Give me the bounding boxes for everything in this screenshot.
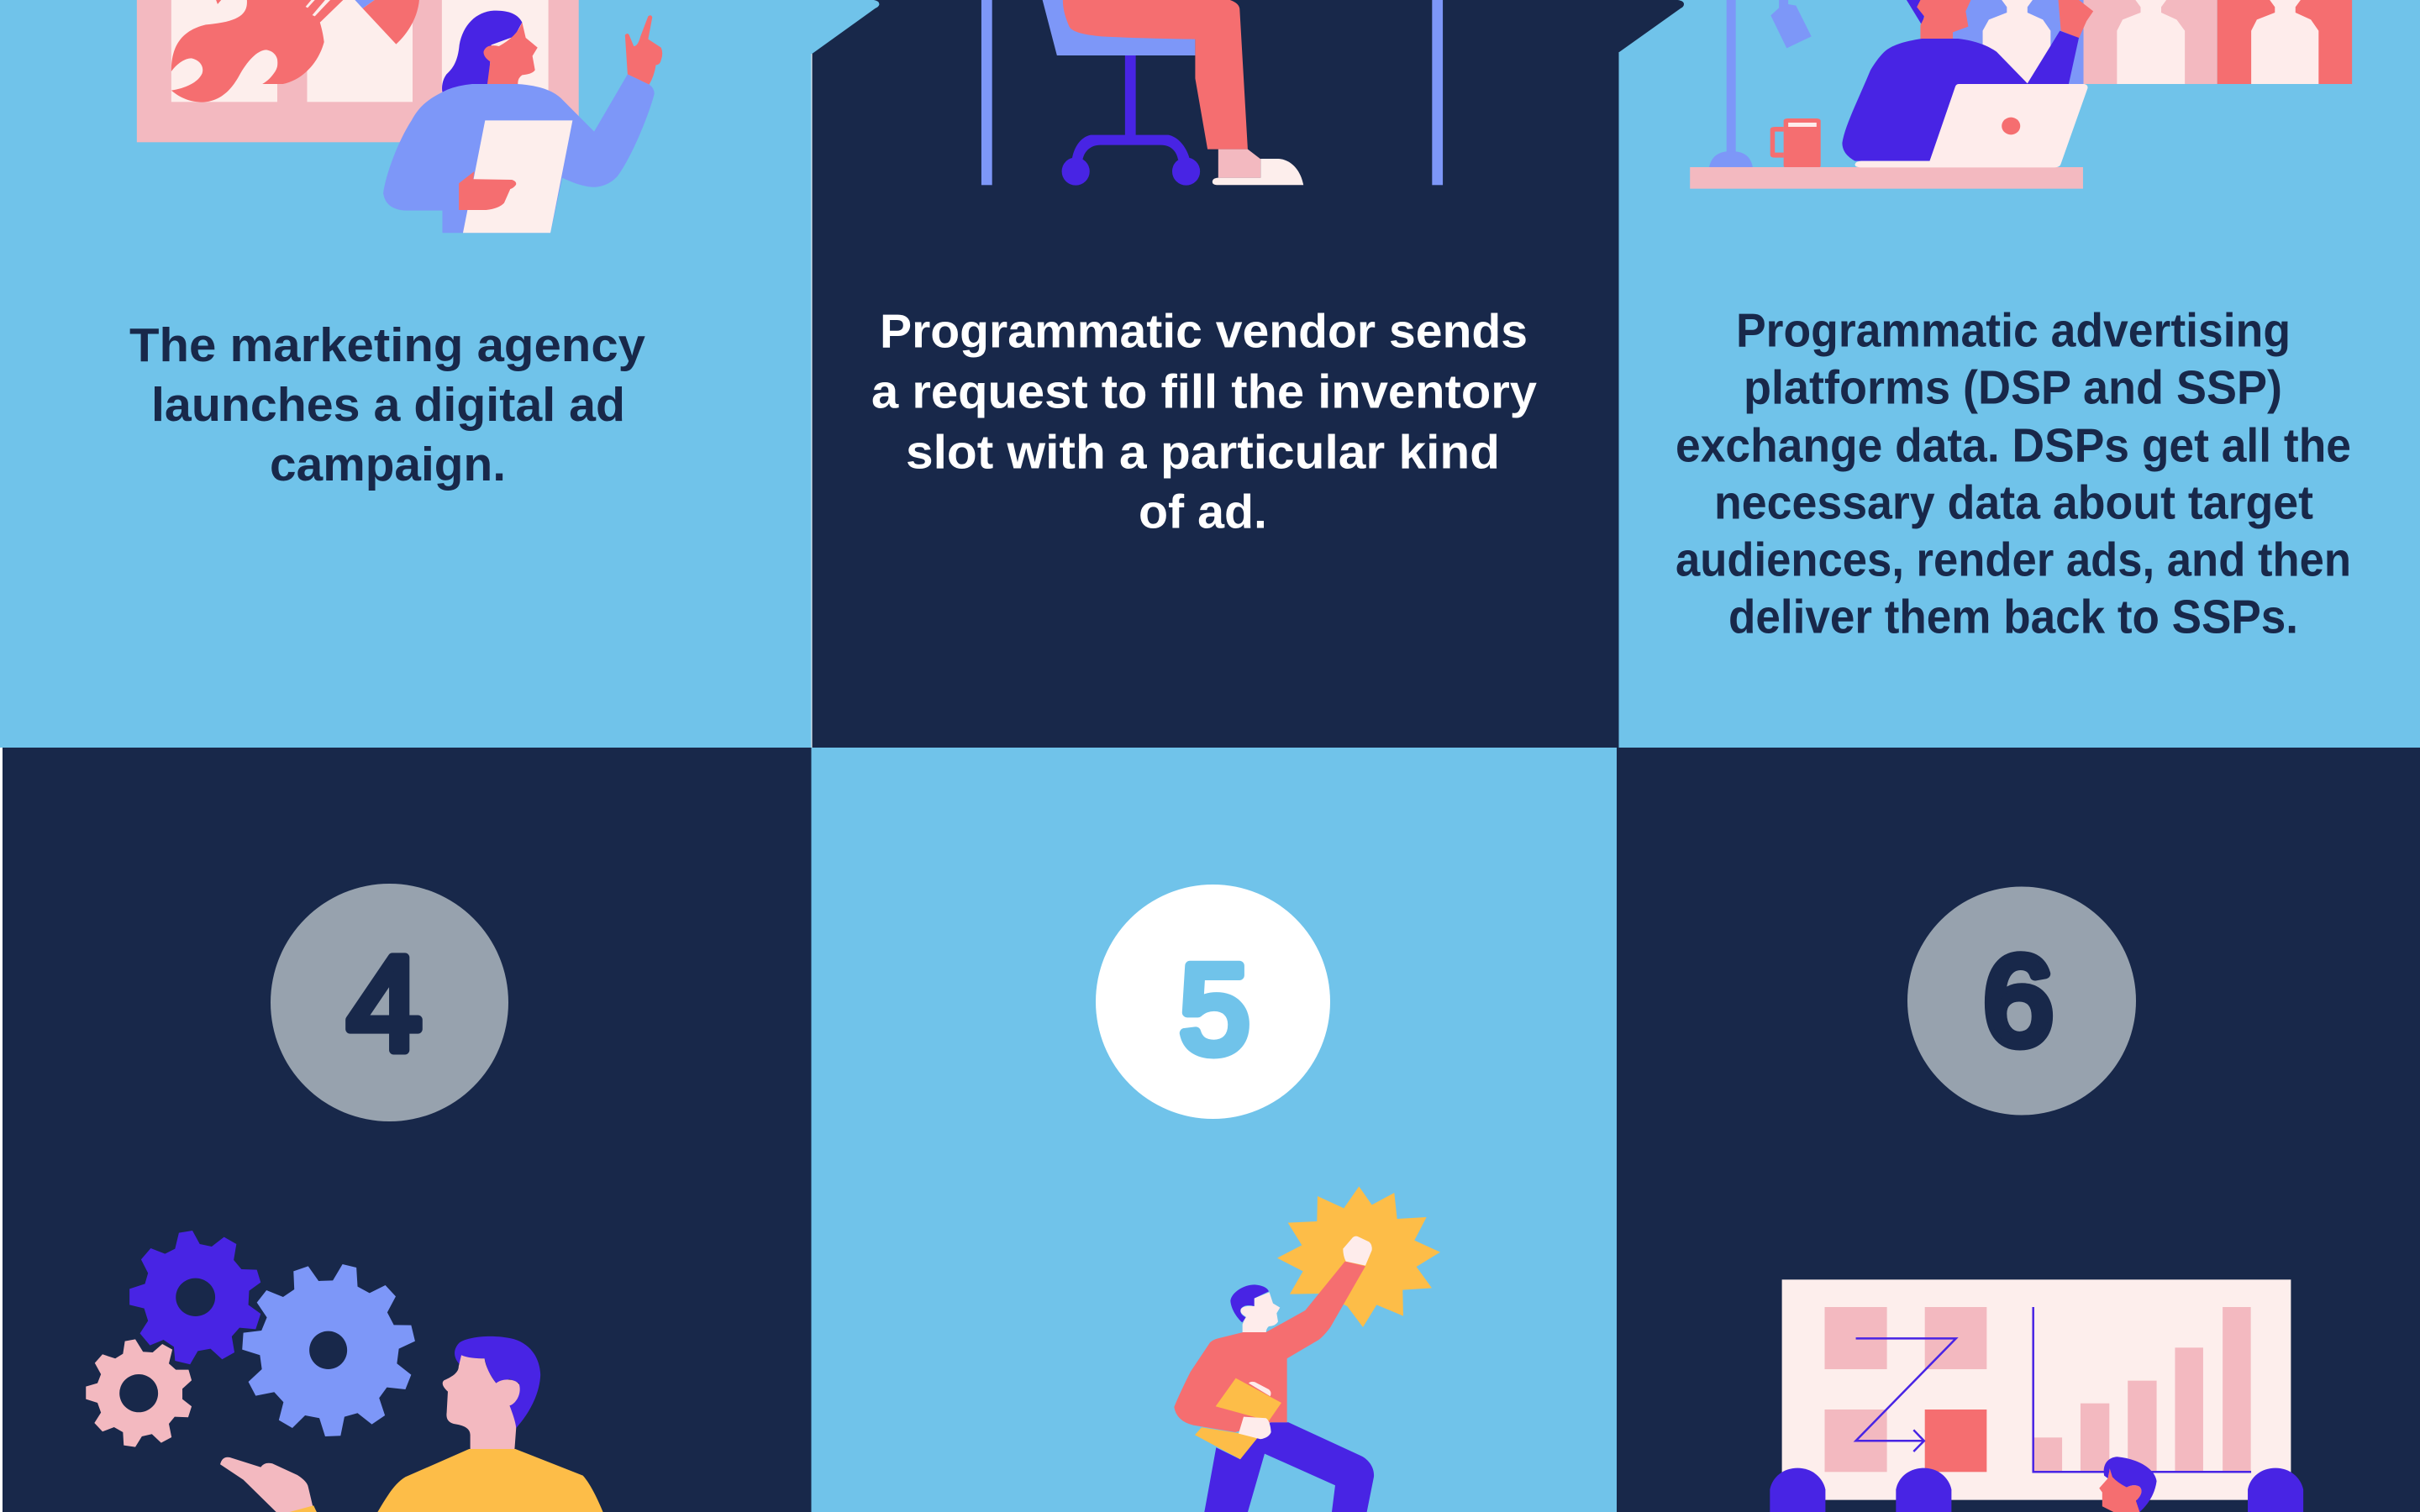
panel: step 4	[3, 748, 812, 1512]
text: step 2 description	[871, 304, 1537, 539]
number badge 4: 4	[347, 928, 422, 1079]
text: step 3 description: Programmatic advertising	[1736, 304, 2291, 358]
text: step 2 description: Programmatic vendor sends	[880, 304, 1528, 358]
text: step 3 description: exchange data. DSPs get all the	[1676, 418, 2351, 472]
text: step 3 description	[1676, 304, 2351, 643]
text: step 2 description: a request to fill the inventory	[871, 365, 1537, 418]
text: step 1 description: launches a digital ad	[151, 378, 625, 432]
text: step 1 description: campaign.	[270, 438, 506, 491]
illustration: person at laptop with audience profiles	[1690, 0, 2352, 189]
number badge 5	[1096, 885, 1330, 1119]
number badge 6	[1907, 887, 2136, 1116]
text: step 1 description: The marketing agency	[129, 318, 645, 372]
panel: step 3	[1618, 0, 2420, 748]
panel: step 1	[0, 0, 879, 748]
illustration: man punching a burst star	[1174, 1186, 1440, 1512]
number badge 6: 6	[1983, 930, 2054, 1071]
panel: step 2	[812, 0, 1684, 748]
illustration: person seated on office chair at desk	[981, 0, 1443, 186]
text: step 3 description: deliver them back to SSPs.	[1728, 590, 2298, 643]
illustration: audience watching a presentation chart	[1770, 1279, 2303, 1512]
number badge 4	[271, 884, 508, 1121]
illustration: woman presenting ad creatives on a board	[137, 0, 662, 233]
text: step 2 description: slot with a particular kind	[906, 425, 1500, 479]
panel: step 6	[1617, 748, 2420, 1512]
panel: step 5	[812, 748, 1617, 1512]
text: step 3 description: necessary data about target	[1714, 475, 2313, 529]
illustration: man looking at gears	[86, 1231, 603, 1512]
number badge 5: 5	[1180, 938, 1249, 1079]
text: step 3 description: audiences, render ads, and then	[1676, 533, 2351, 586]
text: step 2 description: of ad.	[1139, 486, 1267, 539]
text: step 3 description: platforms (DSP and SSP)	[1744, 361, 2282, 415]
text: step 1 description	[129, 318, 645, 491]
